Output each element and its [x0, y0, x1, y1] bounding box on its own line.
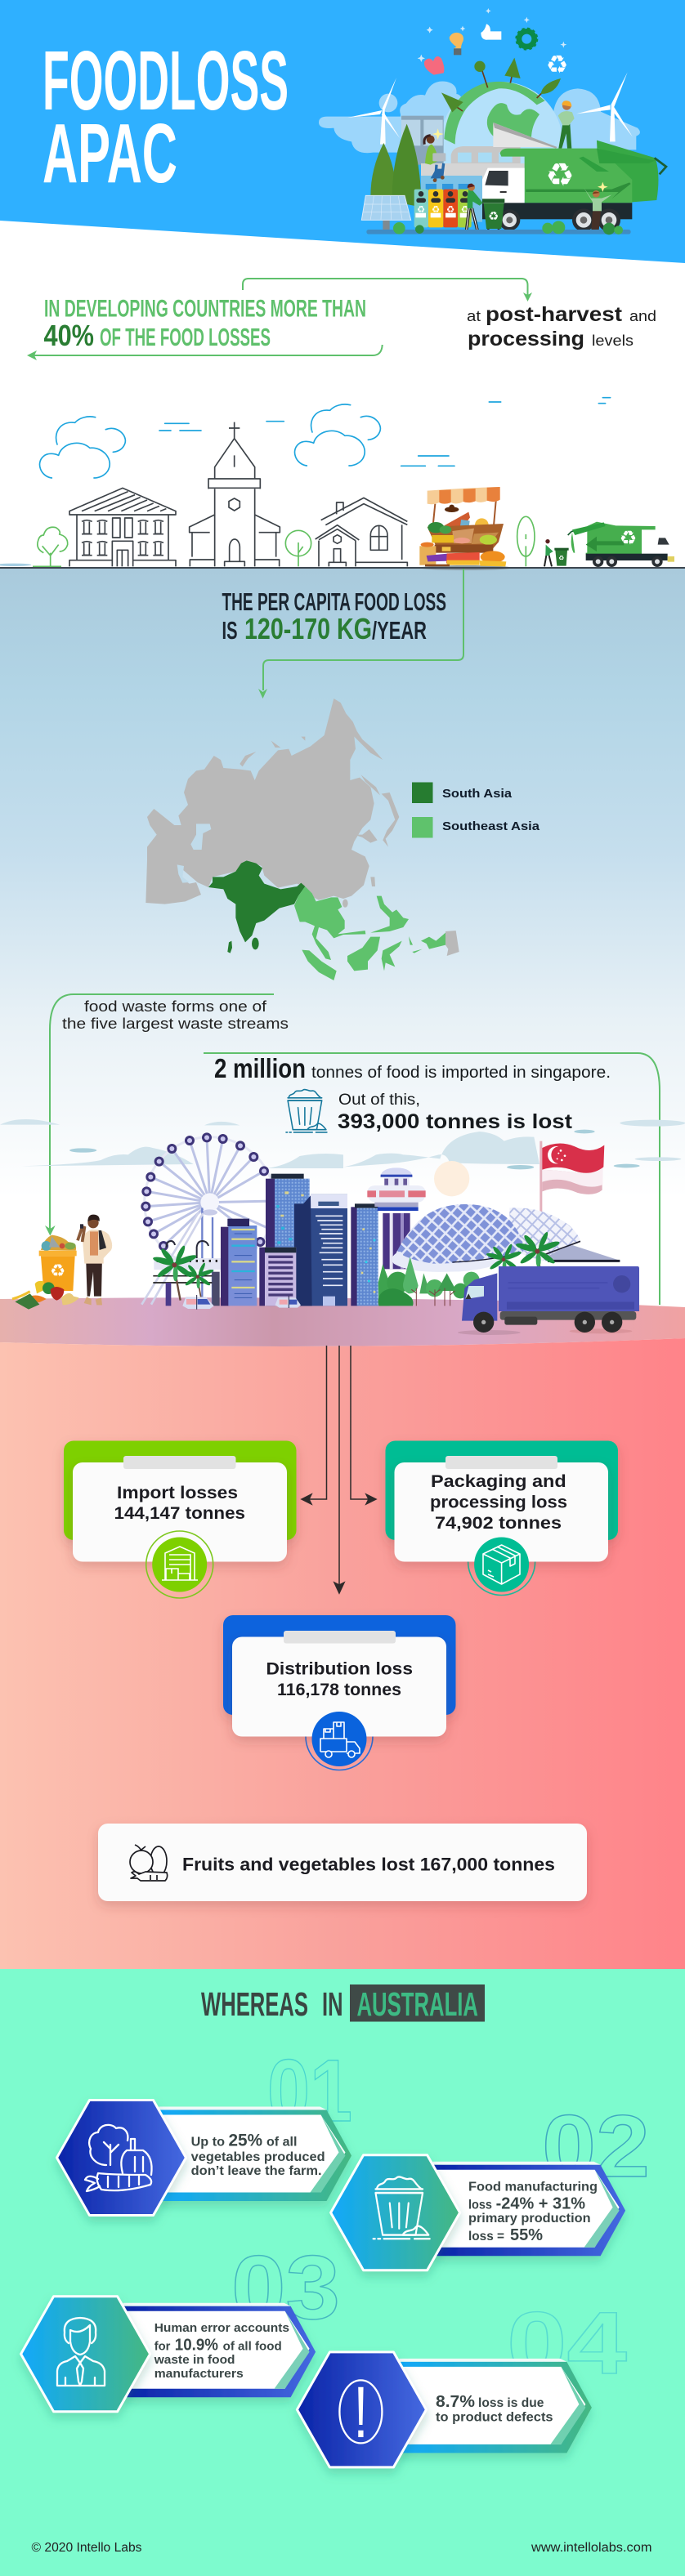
callout: fruits and vegetables lost — [98, 1824, 587, 1901]
icon: box — [474, 1538, 529, 1592]
ground line — [0, 565, 685, 570]
pale clouds — [0, 1119, 685, 1168]
item 2: food manufacturing: loss — [468, 2199, 492, 2212]
esplanade domes — [392, 1204, 621, 1272]
green truck — [597, 141, 658, 202]
footer website: www.intellolabs.com — [531, 2541, 652, 2555]
clouds — [40, 398, 611, 478]
icon: waste bin — [374, 2176, 430, 2239]
outlined number 03: 03 — [231, 2238, 340, 2338]
tower 3 — [259, 1248, 296, 1306]
outlined number 02: 02 — [542, 2096, 650, 2195]
card: import losses: 144,147 tonnes — [114, 1503, 245, 1523]
house — [316, 498, 407, 566]
blue puddle — [0, 564, 31, 566]
card: packaging and processing loss: 74,902 tonnes — [435, 1513, 562, 1533]
item 1: vegetables — [57, 2100, 351, 2216]
title: FOODLOSS — [43, 33, 289, 127]
wind turbines — [347, 72, 633, 145]
green headline: developing countries: 40% — [44, 319, 94, 352]
arrow: import to truck — [204, 1053, 660, 1305]
southeast asia — [294, 886, 445, 980]
text: post-harvest and processing levels — [467, 303, 656, 350]
heading: per capita food loss: IS — [222, 616, 237, 645]
item 1: vegetables: Up to — [191, 2136, 225, 2150]
australia section background — [0, 1969, 685, 2576]
icon: waste bin — [286, 1089, 327, 1132]
heading: whereas in australia: AUSTRALIA — [356, 1985, 478, 2023]
tower 1 — [221, 1219, 257, 1306]
item 1: vegetables: don’t leave the farm. — [191, 2164, 322, 2178]
text: 2 million tonnes imported: Out of this, — [338, 1092, 420, 1109]
green headline: developing countries: IN DEVELOPING COUNTRIES MORE THAN — [44, 296, 366, 322]
text: food waste stream: the five largest waste streams — [62, 1015, 289, 1032]
icon: delivery truck — [312, 1712, 366, 1766]
singapore flag — [539, 1141, 604, 1212]
item 2: food manufacturing — [331, 2155, 625, 2270]
buildings behind truck — [421, 163, 525, 182]
outlined number 01: 01 — [267, 2041, 352, 2140]
card: distribution loss — [223, 1615, 456, 1770]
arrow: losses bracket — [33, 345, 383, 355]
hero illustration: recycling truck and earth: ♻ — [545, 156, 575, 194]
grey mainland — [146, 699, 383, 904]
card: packaging and processing loss — [386, 1441, 618, 1595]
monorail pods — [182, 1295, 301, 1310]
icon: person in tie — [57, 2318, 105, 2386]
south asia — [208, 860, 305, 942]
text: post-harvest and processing levels: levels — [592, 333, 634, 349]
tower 5 — [351, 1203, 378, 1306]
item 3: human error: for — [154, 2339, 171, 2353]
hero illustration: recycling truck and earth: ♻ — [546, 51, 568, 79]
green headline: developing countries — [44, 296, 366, 352]
ground strip — [0, 1297, 685, 1346]
title: APAC — [43, 106, 177, 200]
compost bin with food scraps: ♻ — [50, 1261, 65, 1282]
item 1: vegetables: vegetables produced — [191, 2150, 325, 2164]
item 2: food manufacturing: loss = — [468, 2230, 504, 2243]
arrowhead: map — [258, 689, 267, 699]
floating icons — [424, 56, 444, 75]
hero illustration: recycling truck and earth — [319, 8, 666, 234]
item 3: human error: waste in food — [154, 2353, 235, 2367]
item 4: product defects — [297, 2352, 592, 2467]
card: distribution loss: 116,178 tonnes — [277, 1680, 401, 1699]
produce market stall — [419, 487, 513, 570]
trees — [378, 1257, 480, 1306]
arrow: developing countries to post-harvest — [243, 279, 528, 296]
card: distribution loss: Distribution loss — [266, 1659, 413, 1678]
text: post-harvest and processing levels: processing — [468, 328, 584, 350]
oval tree — [517, 516, 535, 566]
outlined number 04: 04 — [507, 2293, 627, 2392]
text: post-harvest and processing levels: post-harvest — [486, 303, 623, 326]
papua grey — [445, 931, 459, 956]
item 4: product defects: to product defects — [436, 2410, 553, 2424]
blue delivery truck — [458, 1266, 639, 1335]
text: 2 million tonnes imported: tonnes of food is imported in singapore. — [311, 1064, 611, 1082]
grey islands — [240, 737, 399, 886]
map of Asia — [146, 699, 459, 980]
card: packaging and processing loss: processing loss — [430, 1492, 567, 1511]
hero illustration: recycling truck and earth: ♻ — [461, 203, 469, 215]
recycling bins — [414, 190, 428, 227]
map legend: South Asia — [442, 787, 513, 801]
callout: fruits and vegetables lost: Fruits and vegetables lost 167,000 tonnes — [182, 1855, 555, 1874]
title — [43, 33, 289, 200]
green headline: developing countries: OF THE FOOD LOSSES — [100, 323, 271, 351]
item 3: human error: Human error accounts — [154, 2321, 289, 2335]
singapore skyline — [0, 1119, 685, 1335]
small green truck: ♻ — [620, 527, 637, 550]
church — [190, 422, 280, 566]
hero banner — [0, 0, 685, 263]
person with wheelie bin: ♻ — [558, 554, 564, 561]
arrowhead: waste bin — [45, 1225, 56, 1236]
hero illustration: recycling truck and earth: ♻ — [488, 209, 499, 223]
text: 2 million tonnes imported: 2 million — [214, 1053, 306, 1083]
text: 2 million tonnes imported: 393,000 tonnes is lost — [338, 1110, 573, 1133]
tower 4 — [300, 1194, 347, 1306]
card: packaging and processing loss: Packaging and — [431, 1471, 566, 1491]
little trees on globe — [481, 69, 488, 87]
item 4: product defects: loss is due — [478, 2396, 544, 2410]
arrow: market to per capita map — [263, 569, 463, 690]
city line art — [0, 398, 685, 570]
sun — [434, 1161, 469, 1196]
text: post-harvest and processing levels: and — [629, 308, 656, 324]
pointed trees — [370, 143, 396, 196]
small green truck — [568, 522, 674, 567]
item 2: food manufacturing: primary production — [468, 2212, 591, 2226]
item 2: food manufacturing: -24% + 31% — [496, 2195, 585, 2213]
person pushing bin — [468, 186, 483, 208]
tower 2 — [266, 1174, 311, 1306]
heading: whereas in australia: IN — [322, 1985, 343, 2023]
heading: per capita food loss — [222, 587, 446, 645]
map legend: Southeast Asia — [442, 819, 540, 833]
hero illustration: recycling truck and earth: ♻ — [446, 203, 454, 215]
item 4: product defects: 8.7% — [436, 2393, 475, 2411]
solar panel — [383, 219, 390, 230]
heading: per capita food loss: 120-170 KG — [244, 612, 372, 645]
person standing — [78, 1215, 112, 1305]
palm trees — [152, 1231, 561, 1302]
sky gradient section — [0, 568, 685, 1197]
small round tree — [285, 530, 311, 566]
flow arrows — [302, 1346, 376, 1593]
arrowhead: post-harvest — [523, 292, 532, 301]
text: 2 million tonnes imported — [214, 1053, 611, 1133]
item 2: food manufacturing: 55% — [510, 2226, 543, 2244]
map legend — [412, 783, 540, 838]
hero illustration: recycling truck and earth: ♻ — [417, 203, 425, 215]
coral section — [0, 1338, 685, 1969]
hero illustration: recycling truck and earth: ♻ — [432, 203, 440, 215]
heading: whereas in australia — [201, 1984, 485, 2023]
white page background — [0, 0, 685, 572]
base strip and bushes — [366, 230, 631, 234]
compost bin with food scraps — [12, 1235, 79, 1310]
icon: warehouse — [146, 1531, 213, 1598]
text: food waste stream — [62, 998, 289, 1032]
woman with laptop — [431, 169, 443, 178]
heading: whereas in australia: WHEREAS — [201, 1985, 308, 2023]
person with wheelie bin — [544, 539, 569, 566]
icon: exclamation — [339, 2380, 382, 2443]
item 1: vegetables: of all — [266, 2136, 297, 2150]
text: food waste stream: food waste forms one of — [84, 998, 267, 1015]
item 3: human error: manufacturers — [154, 2367, 244, 2381]
arrowhead: losses bracket — [27, 350, 37, 360]
icon: fruit and vegetables — [130, 1845, 168, 1881]
footer copyright: © 2020 Intello Labs — [31, 2541, 142, 2555]
card: import losses — [64, 1441, 296, 1598]
heading: per capita food loss: THE PER CAPITA FOOD LOSS — [222, 587, 446, 616]
school building — [69, 488, 176, 566]
item 3: human error: 10.9% — [175, 2336, 218, 2354]
item 1: vegetables: 25% — [229, 2132, 262, 2150]
heading: per capita food loss: /YEAR — [372, 616, 427, 645]
kid cheering — [584, 188, 611, 211]
ferris wheel — [141, 1132, 275, 1306]
item 2: food manufacturing: Food manufacturing — [468, 2181, 598, 2194]
chute on truck — [493, 123, 557, 147]
item 3: human error: of all food — [223, 2339, 282, 2353]
left tree — [33, 527, 68, 566]
icon: vegetables — [85, 2125, 152, 2191]
text: post-harvest and processing levels: at — [467, 308, 481, 324]
control tower — [367, 1167, 426, 1269]
card: import losses: Import losses — [117, 1483, 238, 1502]
item 3: human error — [21, 2297, 316, 2412]
arrow: waste stream to bin — [50, 994, 274, 1230]
worker on truck — [558, 124, 571, 149]
